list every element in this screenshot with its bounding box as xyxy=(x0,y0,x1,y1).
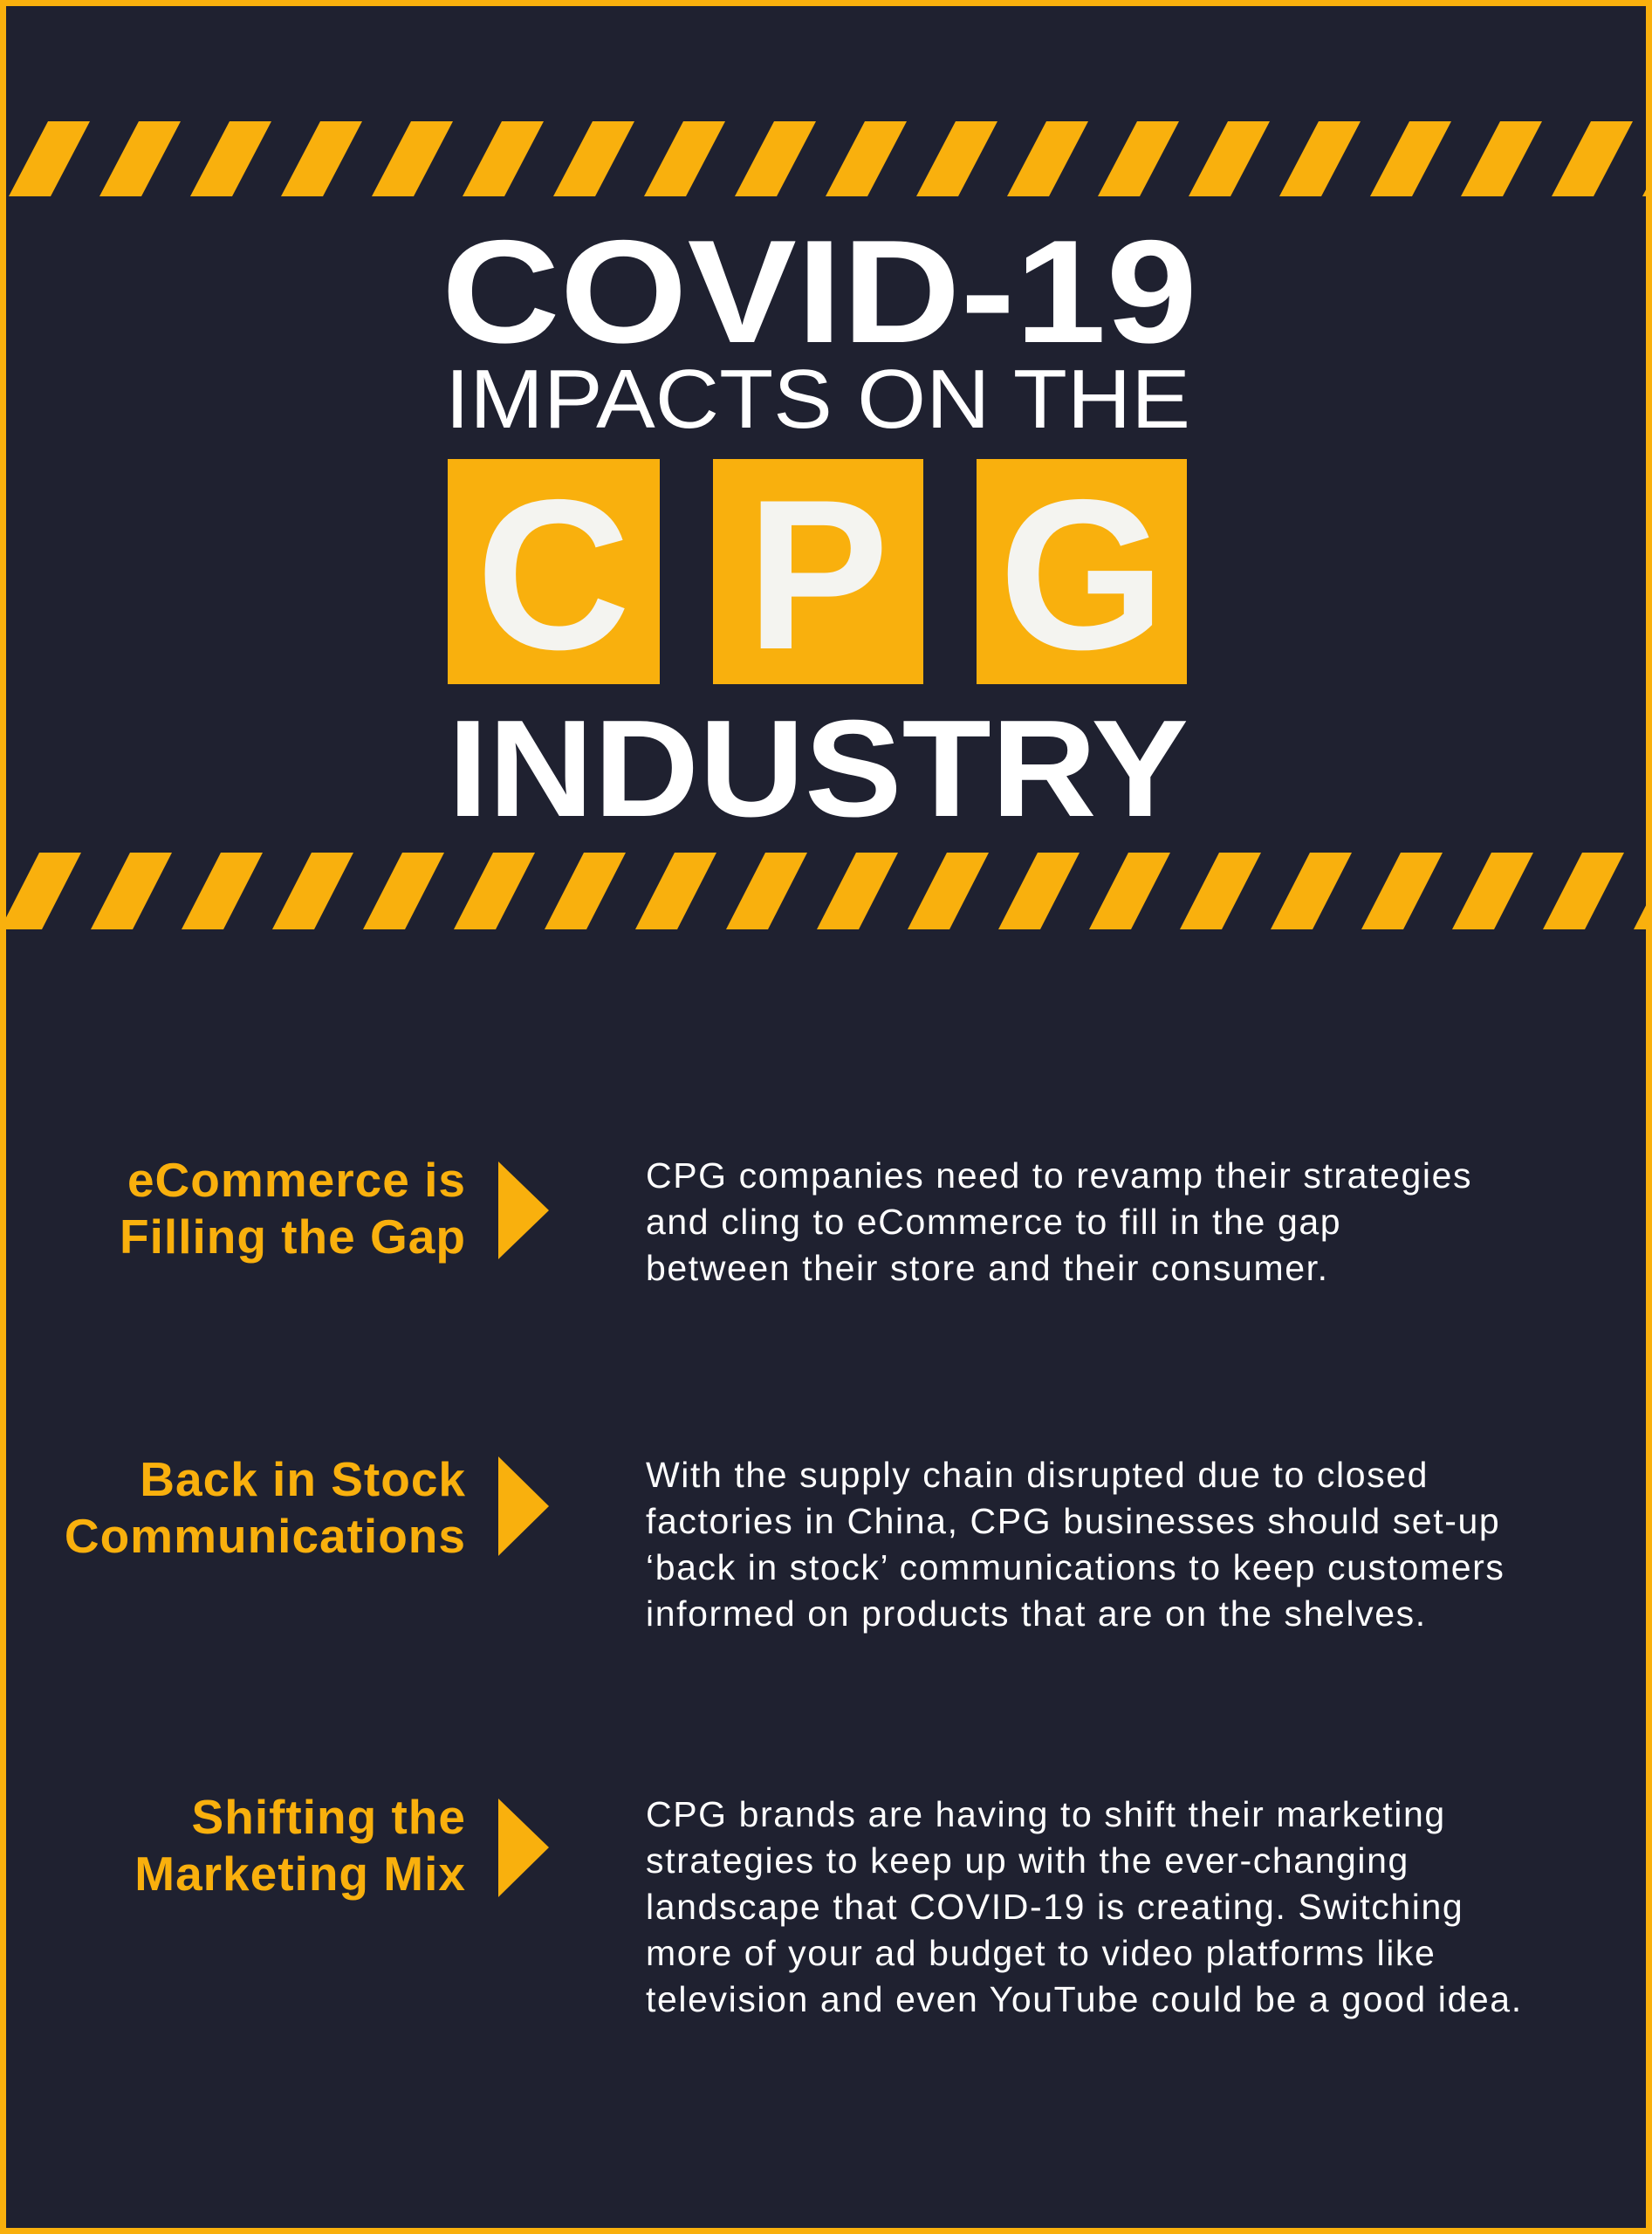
section 2 heading: Back in Stock xyxy=(140,1452,466,1506)
section 3 heading: Marketing Mix xyxy=(134,1847,466,1901)
section 2 text: factories in China, CPG businesses should set-up xyxy=(646,1501,1500,1541)
arrow 1 xyxy=(498,1162,549,1259)
section 2 heading: Communications xyxy=(65,1509,466,1563)
section 3 text: more of your ad budget to video platforms like xyxy=(646,1933,1436,1973)
section 3 heading: Shifting the xyxy=(192,1790,466,1844)
section 1 heading xyxy=(120,1153,466,1264)
section 1 text xyxy=(646,1155,1472,1288)
section 2 text: With the supply chain disrupted due to closed xyxy=(646,1455,1429,1495)
arrow 2 xyxy=(498,1456,549,1556)
section 2 text xyxy=(646,1455,1505,1634)
section 2 heading xyxy=(65,1452,466,1563)
section 1 text: and cling to eCommerce to fill in the gap xyxy=(646,1202,1341,1242)
header graphic xyxy=(6,121,1646,929)
section 3 text: CPG brands are having to shift their marketing xyxy=(646,1794,1446,1834)
CPG boxes: C xyxy=(476,455,630,694)
section 2 text: ‘back in stock’ communications to keep customers xyxy=(646,1547,1505,1587)
section 2 text: informed on products that are on the shelves. xyxy=(646,1593,1427,1634)
section 3 text: television and even YouTube could be a good idea. xyxy=(646,1979,1523,2019)
CPG boxes xyxy=(448,455,1187,694)
title: INDUSTRY: INDUSTRY xyxy=(448,692,1189,846)
bottom hazard stripes xyxy=(6,853,1646,929)
section 1 heading: eCommerce is xyxy=(127,1153,466,1207)
top hazard stripes xyxy=(6,121,1646,196)
title: COVID-19: COVID-19 xyxy=(442,209,1197,373)
section 3 text: strategies to keep up with the ever-changing xyxy=(646,1840,1409,1881)
section 1 heading: Filling the Gap xyxy=(120,1210,466,1264)
arrow 3 xyxy=(498,1799,549,1897)
section 3 text xyxy=(646,1794,1523,2019)
CPG boxes: G xyxy=(999,455,1165,694)
section 3 heading xyxy=(134,1790,466,1901)
section 3 text: landscape that COVID-19 is creating. Switching xyxy=(646,1887,1463,1927)
subtitle: impacts on the: IMPACTS ON THE xyxy=(445,353,1190,446)
section 1 text: CPG companies need to revamp their strategies xyxy=(646,1155,1472,1196)
section 1 text: between their store and their consumer. xyxy=(646,1248,1329,1288)
CPG boxes: P xyxy=(746,455,889,694)
